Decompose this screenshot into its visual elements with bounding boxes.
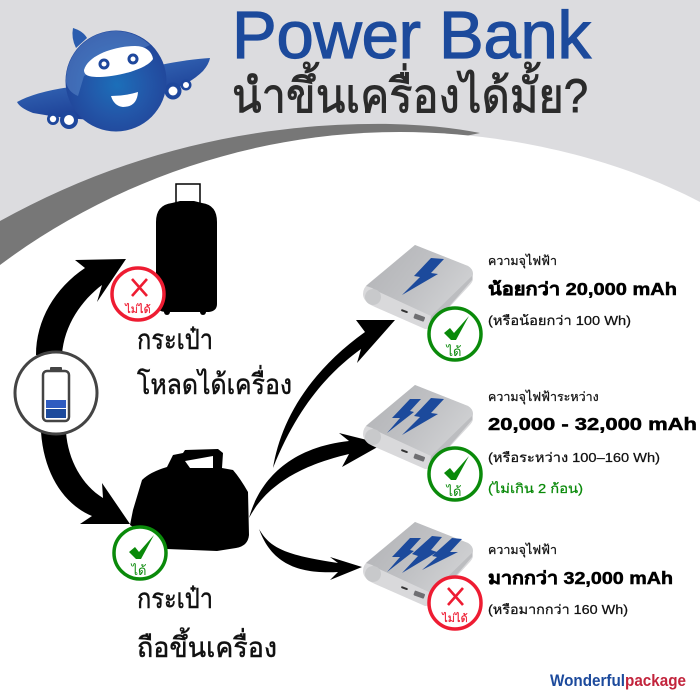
badge: allowed, bank 2: ได้ xyxy=(446,484,461,499)
text: under 20,000 mAh: น้อยกว่า 20,000 mAh xyxy=(488,279,677,299)
badge: allowed, bag xyxy=(114,527,166,579)
icon: carry-on bag xyxy=(130,449,249,551)
text: 20,000 - 32,000 mAh xyxy=(488,390,697,496)
text: 20,000 - 32,000 mAh: ความจุไฟฟ้าระหว่าง xyxy=(488,390,599,405)
badge: allowed, bank 2 xyxy=(429,448,481,500)
text: over 32,000 mAh xyxy=(488,543,673,617)
text: 20,000 - 32,000 mAh: 20,000 - 32,000 mAh xyxy=(488,414,697,434)
text: under 20,000 mAh xyxy=(488,254,677,328)
background: top grey panel xyxy=(0,0,700,270)
text: under 20,000 mAh: (หรือน้อยกว่า 100 Wh) xyxy=(488,313,631,328)
text: over 32,000 mAh: ความจุไฟฟ้า xyxy=(488,543,557,558)
badge: not allowed, bank 3: ไม่ได้ xyxy=(441,612,468,625)
arrow: bag to mid capacity xyxy=(249,433,383,518)
power bank 3 xyxy=(362,522,473,606)
badge: allowed, bank 1 xyxy=(429,308,481,360)
label: carry-on baggage: ถือขึ้นเครื่อง xyxy=(137,627,277,663)
arrow: bag to low capacity xyxy=(273,320,395,468)
icon: battery in circle xyxy=(15,352,97,434)
power bank 2 xyxy=(362,385,473,469)
label: carry-on baggage: กระเป๋า xyxy=(137,583,213,614)
arrow: battery to carry-on bag xyxy=(41,432,130,524)
arrow: battery to checked luggage xyxy=(36,259,126,355)
label: checked baggage: กระเป๋า xyxy=(137,324,213,355)
text: over 32,000 mAh: มากกว่า 32,000 mAh xyxy=(488,568,673,588)
label: checked baggage xyxy=(137,324,292,400)
text: over 32,000 mAh: (หรือมากกว่า 160 Wh) xyxy=(488,602,628,617)
text: under 20,000 mAh: ความจุไฟฟ้า xyxy=(488,254,557,269)
icon: airplane mascot xyxy=(17,28,210,132)
power bank 1 xyxy=(362,245,473,329)
badge: allowed, bank 1: ได้ xyxy=(446,344,461,359)
title: Power Bank: Power Bank xyxy=(232,0,592,73)
badge: not allowed, suitcase xyxy=(112,268,164,320)
text: 20,000 - 32,000 mAh: (หรือระหว่าง 100–160 Wh) xyxy=(488,450,660,465)
label: carry-on baggage xyxy=(137,583,277,663)
logo: Wonderfulpackage: Wonderfulpackage xyxy=(550,671,686,690)
text: 20,000 - 32,000 mAh: (ไม่เกิน 2 ก้อน) xyxy=(488,481,583,496)
curved dark grey band xyxy=(0,124,480,280)
subtitle: นำขึ้นเครื่องได้มั้ย? xyxy=(232,62,588,122)
icon: checked suitcase xyxy=(156,184,217,315)
label: checked baggage: โหลดได้เครื่อง xyxy=(137,365,292,400)
badge: allowed, bag: ได้ xyxy=(131,563,146,578)
badge: not allowed, suitcase: ไม่ได้ xyxy=(124,303,151,316)
badge: not allowed, bank 3 xyxy=(429,577,481,629)
arrow: bag to high capacity xyxy=(259,529,362,580)
